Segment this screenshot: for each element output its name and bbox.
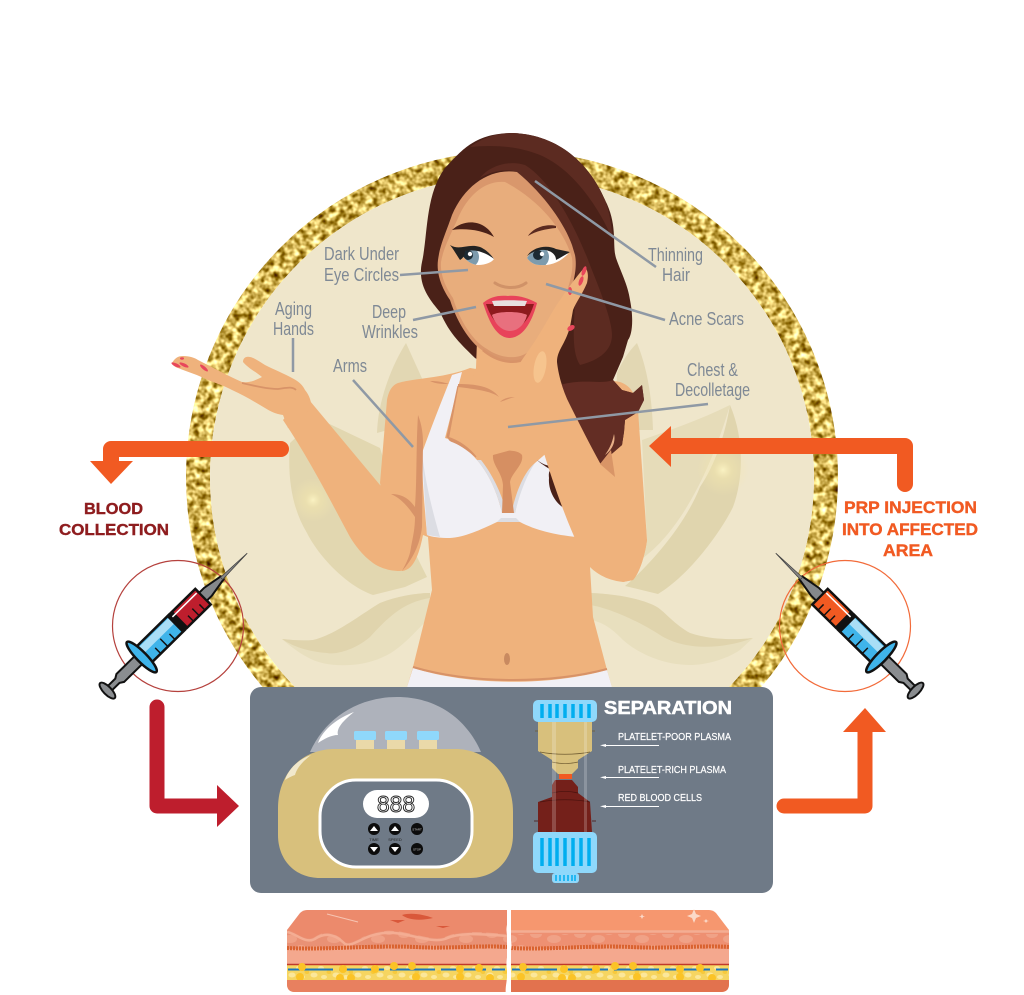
nose [495,283,526,288]
heading: blood collection: BLOOD [84,501,143,518]
heading: blood collection: COLLECTION [59,522,169,539]
display digits: 888 [377,791,415,817]
callout labels: Acne Scars [669,309,744,329]
palm highlight [531,350,549,384]
left eyebrow [452,222,494,237]
chin shadow [483,350,527,362]
callout labels: Decolletage [675,380,750,400]
heading: PRP injection [842,498,978,560]
skin cross-section [287,909,730,993]
callout labels: Wrinkles [362,322,418,342]
callout labels: Thinning [648,245,703,265]
woman figure [171,133,647,687]
callout labels: Deep [372,302,406,322]
callout labels: Arms [333,356,367,376]
right forearm and hand [520,267,647,582]
strap skin shadow [447,386,476,457]
heading: PRP injection: PRP INJECTION [844,498,977,517]
body glare [285,755,311,780]
right eyebrow [528,225,556,236]
separation labels: PLATELET-RICH PLASMA [618,765,726,776]
callout labels: Hair [662,265,690,285]
torso and left upper arm [380,368,620,687]
callout labels: Dark Under [324,244,399,264]
underwear edge [413,667,607,680]
button labels: STOP [413,848,421,852]
right upper arm [590,381,647,582]
separation title: SEPARATION [604,698,732,718]
circle: right syringe [780,560,910,692]
circle: left syringe [112,560,244,692]
face [438,171,576,362]
control panel [320,780,472,867]
display [363,790,429,818]
hand crease [242,383,296,390]
hair curl [560,380,644,464]
cleavage [493,450,522,513]
bra inner shadow [422,453,535,537]
separation labels: PLATELET-POOR PLASMA [618,732,731,743]
sparkles [639,909,709,923]
left forearm [283,395,420,571]
cream circle [210,175,814,779]
centrifuge tubes [354,731,439,750]
separation labels [618,732,731,804]
right eye [527,246,570,266]
skin before [287,909,507,993]
centrifuge body [278,749,513,878]
arrow: to blood collection [90,449,281,484]
button labels [369,828,422,852]
face highlight [441,182,572,357]
callout labels [273,244,750,400]
arrow: PRP injection [649,426,905,484]
hair behind bra [537,460,578,515]
left eye [450,245,494,265]
collar bone shadows [430,381,515,402]
underwear [407,668,612,687]
dome glare [318,712,354,743]
arrow: from separation [784,708,886,806]
callout labels: Hands [273,319,314,339]
separation tube [533,700,597,883]
callout labels: Aging [275,299,312,319]
arm crease shadow [391,415,423,571]
separation pointers [600,744,659,808]
button labels: START [412,828,422,832]
arm hair shadow [600,450,615,477]
heading: PRP injection: AREA [883,541,933,560]
right hand nails [566,266,588,332]
bra [422,372,590,538]
gold glitter ring [198,163,826,791]
split line [507,909,510,993]
left hand [172,356,312,428]
button labels: TIME [369,837,379,842]
left hand nails [171,357,209,372]
callout lines [293,181,708,447]
icon: PRP syringe [761,538,933,708]
heading: PRP injection: INTO AFFECTED [842,520,978,539]
mouth [483,296,537,338]
icon: blood syringe [90,538,262,708]
neck and chest [452,340,548,458]
centrifuge dome [310,697,481,752]
panel: separation [250,687,773,893]
separation labels: RED BLOOD CELLS [618,793,702,804]
hair inner sweep [480,163,612,365]
navel [504,653,510,665]
callout labels: Chest & [687,360,738,380]
control buttons [368,823,423,855]
heading: blood collection [59,501,169,539]
button labels: SPEED [388,837,402,842]
hair curl highlight [605,434,615,455]
hair back [421,133,644,464]
lotus petals [282,343,753,665]
skin after [511,909,730,993]
hair top light band [470,133,613,240]
arrow: to centrifuge [157,707,239,827]
callout labels: Eye Circles [324,265,399,285]
